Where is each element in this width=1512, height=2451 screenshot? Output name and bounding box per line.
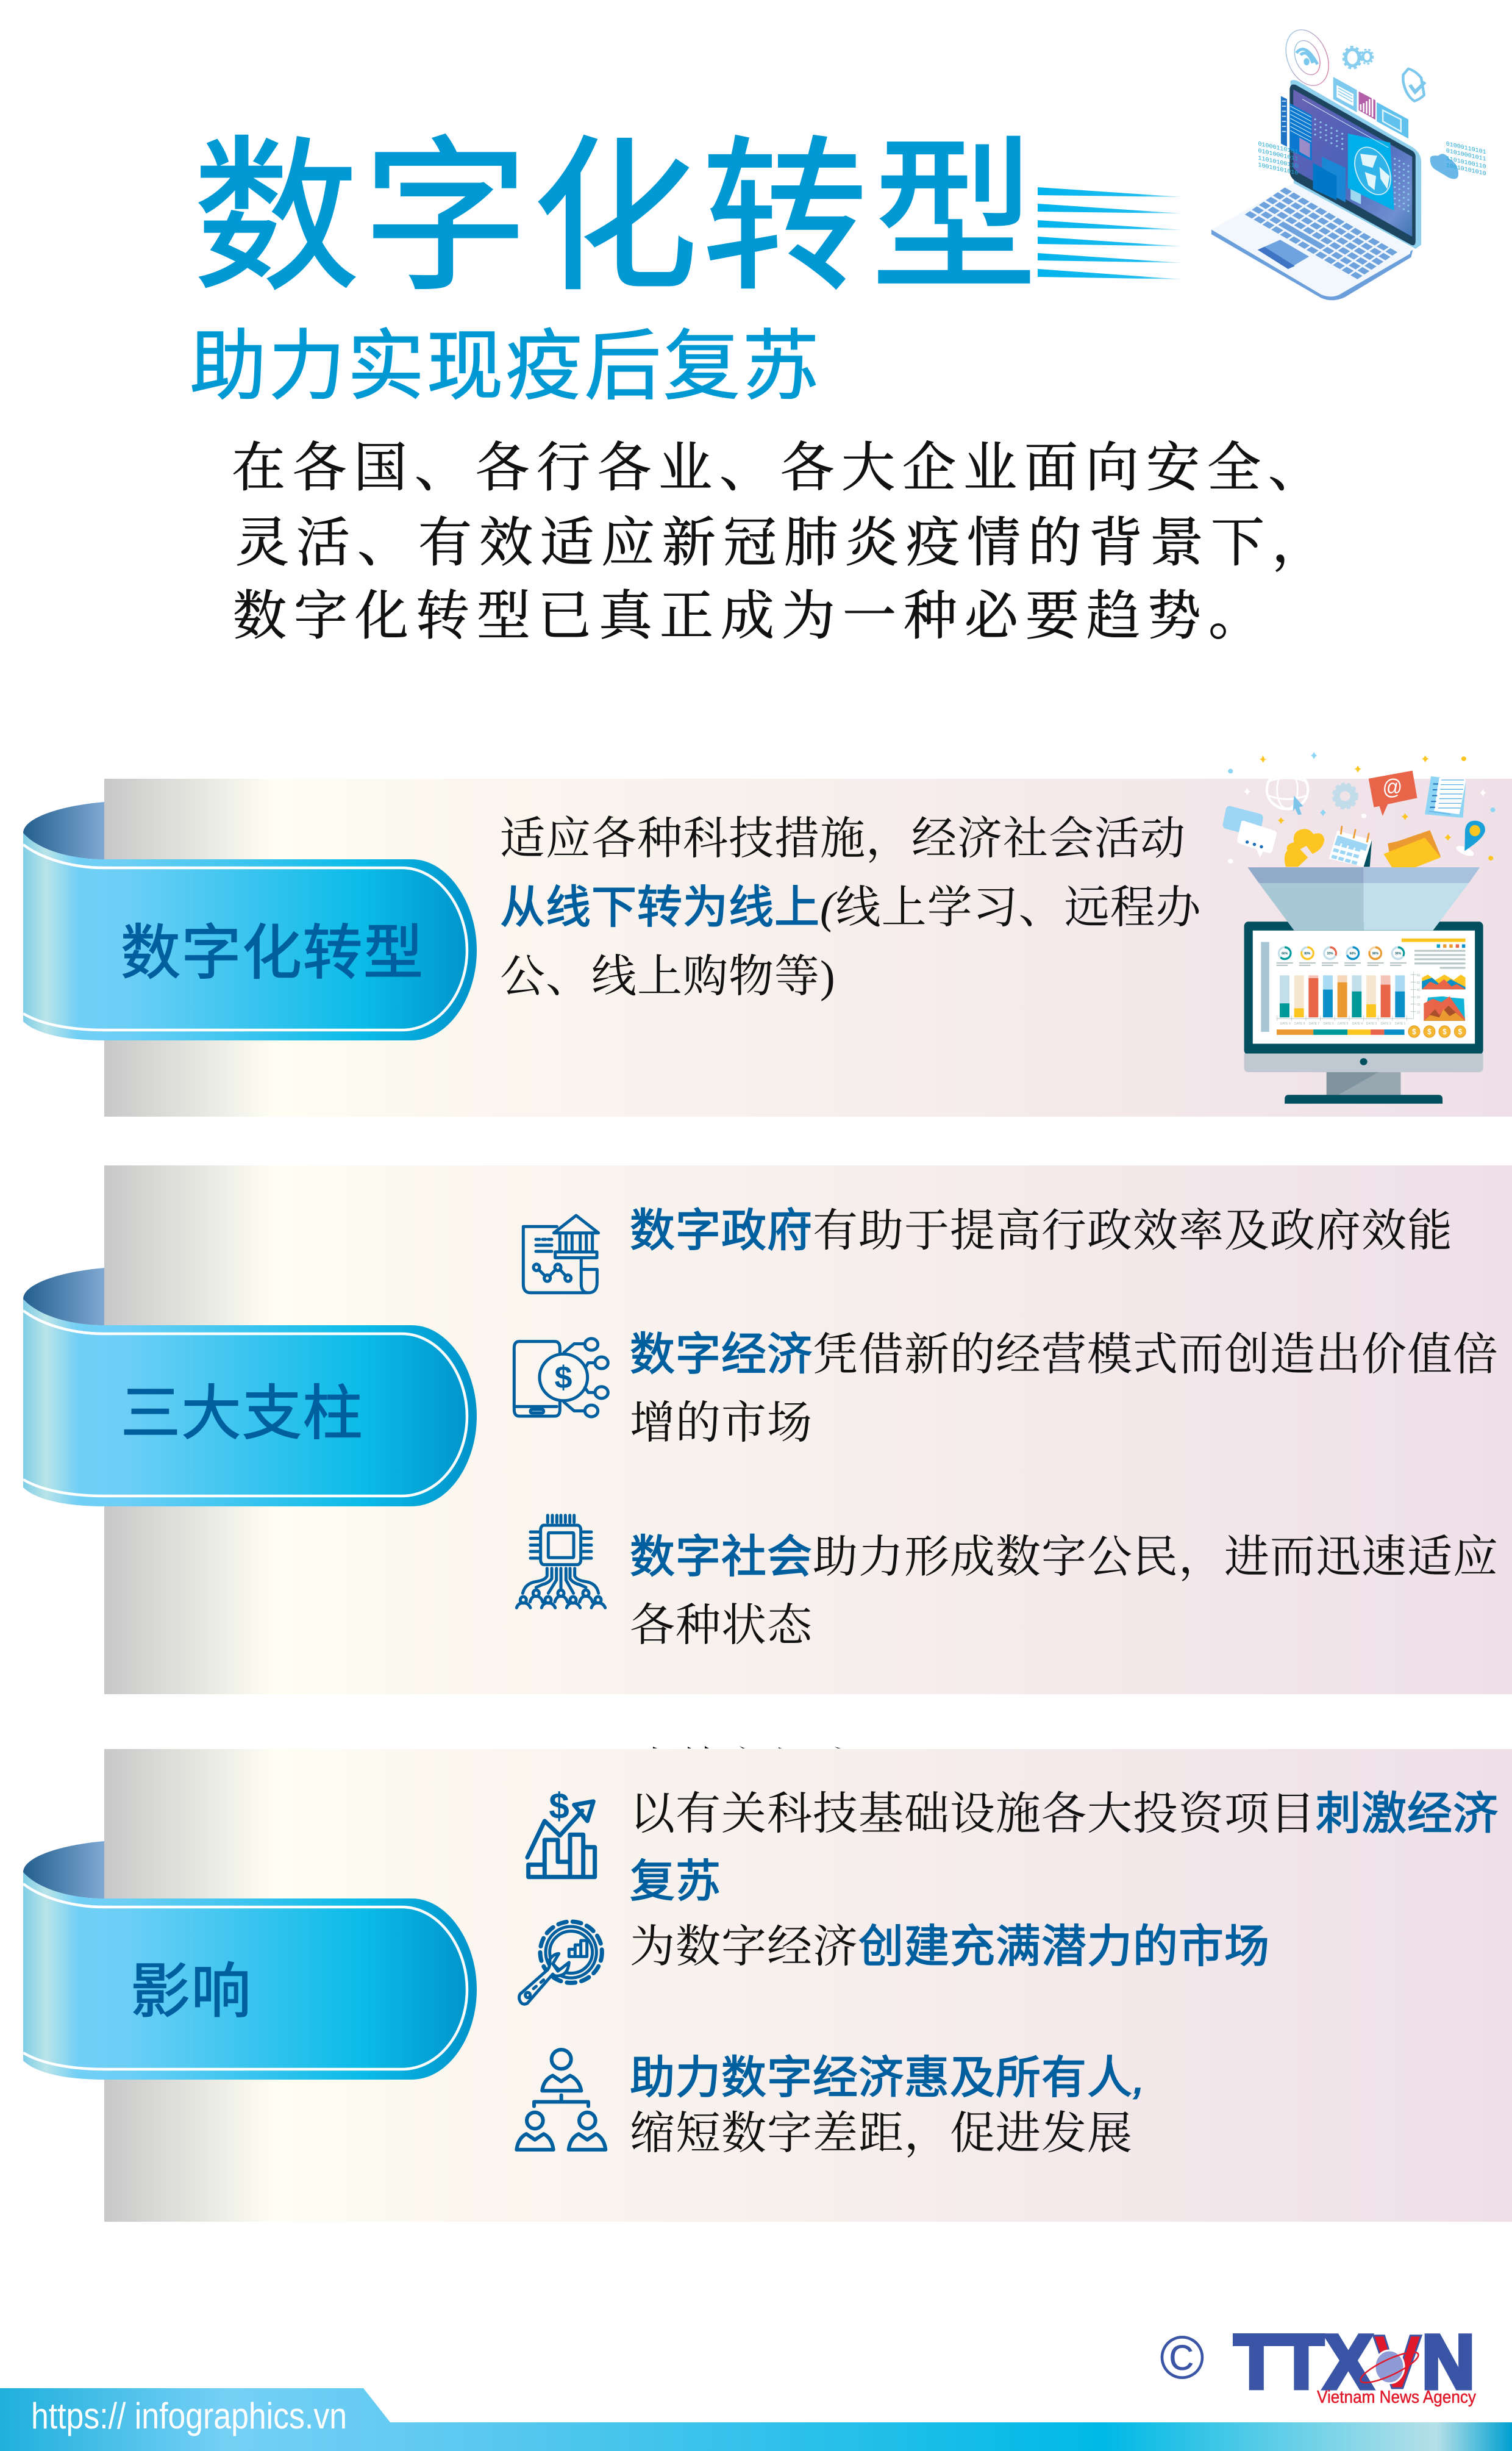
ribbon heading: three pillars: 三大支柱: [121, 1379, 363, 1447]
illustration: data funnel into monitor: DATE 2: [1380, 1022, 1391, 1026]
illustration: data funnel into monitor: 66%: [1282, 952, 1288, 956]
illustration: laptop with floating icons: 01010001011: [1446, 148, 1486, 163]
text: digital society: 数字社会助力形成数字公民，进而迅速适应: [630, 1531, 1499, 1583]
illustration: laptop with floating icons: 11010100110: [1446, 156, 1486, 171]
illustration: data funnel into monitor: 30: [1417, 996, 1420, 1000]
ribbon heading: digital transformation: [23, 802, 477, 1040]
illustration: laptop with floating icons: 10010101010: [1446, 162, 1486, 177]
panel: three pillars: [23, 1165, 1512, 1694]
icon: people hierarchy: [516, 2050, 605, 2150]
illustration: data funnel into monitor: $: [1458, 1027, 1462, 1036]
illustration: data funnel into monitor: 30%: [1395, 952, 1401, 956]
text: digital inclusion: 助力数字经济惠及所有人,: [630, 2052, 1146, 2103]
illustration: data funnel into monitor: $: [1427, 1027, 1432, 1036]
panel: digital transformation: [23, 752, 1512, 1117]
text: digital government: 数字政府有助于提高行政效率及政府效能: [630, 1205, 1453, 1256]
text: digital inclusion: [630, 2052, 1146, 2159]
icon: investment growth: [527, 1786, 595, 1877]
icon: investment growth: $: [549, 1786, 569, 1827]
copyright symbol: ©: [1160, 2324, 1205, 2392]
text: digital economy: [630, 1329, 1499, 1448]
footer band: [0, 2388, 1512, 2451]
footer url: https:// infographics.vn: [31, 2396, 347, 2436]
illustration: data funnel into monitor: $: [1442, 1027, 1447, 1036]
illustration: data funnel into monitor: DATE 1: [1395, 1022, 1405, 1026]
ribbon heading: impact: [23, 1841, 477, 2080]
text: digital society: [630, 1531, 1499, 1651]
illustration: data funnel into monitor: 10: [1417, 1011, 1420, 1014]
illustration: data funnel into monitor: 60: [1417, 974, 1420, 978]
icon: digital society: [516, 1515, 605, 1608]
panel: impact: [23, 1749, 1512, 2222]
icon: digital economy: $: [555, 1360, 572, 1395]
intro paragraph: 灵活、有效适应新冠肺炎疫情的背景下，: [235, 514, 1333, 573]
illustration: laptop with floating icons: 10010101010: [1258, 162, 1298, 177]
illustration: data funnel into monitor: 80%: [1304, 952, 1311, 956]
illustration: data funnel into monitor: 66%: [1350, 952, 1356, 956]
illustration: laptop with floating icons: 01000110101: [1258, 141, 1298, 156]
text: digital inclusion: 缩短数字差距，促进发展: [630, 2109, 1133, 2159]
logo: TTXVN: TTXVN: [1234, 2320, 1475, 2405]
intro paragraph: [232, 439, 1333, 646]
title: 数字化转型: [193, 125, 1041, 310]
text: stimulate economic recovery: 以有关科技基础设施各大投资项目刺激经济: [630, 1788, 1499, 1839]
icon: digital government: [523, 1215, 599, 1293]
ribbon heading: digital transformation: 数字化转型: [121, 919, 424, 986]
speed lines beside title: [1038, 187, 1183, 279]
text: digital transformation description: 公、线上购物等): [500, 952, 836, 1002]
illustration: data funnel into monitor: DATE 9: [1280, 1022, 1291, 1026]
text: digital economy: 增的市场: [630, 1398, 813, 1448]
clipped text remnants above third panel: [653, 1746, 841, 1748]
illustration: laptop with floating icons: 01010001011: [1258, 148, 1298, 163]
illustration: data funnel into monitor: DATE 8: [1294, 1022, 1305, 1026]
illustration: data funnel into monitor: DATE 5: [1338, 1022, 1348, 1026]
illustration: laptop with floating icons: 01000110101: [1446, 141, 1486, 156]
illustration: laptop with floating icons: 11010100110: [1258, 156, 1298, 170]
illustration: data funnel into monitor: $: [1412, 1027, 1416, 1036]
illustration: data funnel into monitor: [1222, 752, 1496, 1104]
text: digital economy: 数字经济凭借新的经营模式而创造出价值倍: [630, 1329, 1499, 1380]
text: digital transformation description: [500, 814, 1202, 1002]
logo: TTXVN: Vietnam News Agency: [1317, 2388, 1476, 2407]
illustration: data funnel into monitor: @: [1383, 775, 1402, 800]
text: create potential market: 为数字经济创建充满潜力的市场: [630, 1921, 1270, 1972]
text: stimulate economic recovery: 复苏: [630, 1856, 721, 1906]
illustration: data funnel into monitor: DATE 6: [1323, 1022, 1334, 1026]
text: digital transformation description: 从线下转为线上(线上学习、远程办: [500, 882, 1202, 933]
text: digital transformation description: 适应各种科技措施，经济社会活动: [500, 814, 1186, 864]
icon: digital economy: [514, 1339, 608, 1417]
illustration: data funnel into monitor: 33%: [1327, 952, 1333, 956]
ribbon heading: impact: 影响: [130, 1958, 252, 2025]
illustration: data funnel into monitor: 90%: [1372, 952, 1378, 956]
intro paragraph: 在各国、各行各业、各大企业面向安全、: [232, 439, 1329, 498]
ribbon heading: three pillars: [23, 1268, 477, 1506]
illustration: data funnel into monitor: 50: [1417, 981, 1420, 985]
illustration: laptop with floating icons: [1211, 25, 1486, 300]
illustration: data funnel into monitor: 20: [1417, 1003, 1420, 1007]
subtitle: 助力实现疫后复苏: [190, 323, 821, 409]
illustration: data funnel into monitor: 40: [1417, 989, 1420, 992]
text: stimulate economic recovery: [630, 1788, 1499, 1906]
text: digital society: 各种状态: [630, 1601, 813, 1651]
icon: gear and wrench: [519, 1922, 602, 2004]
illustration: data funnel into monitor: DATE 3: [1366, 1022, 1377, 1026]
illustration: data funnel into monitor: DATE 4: [1352, 1022, 1363, 1026]
intro paragraph: 数字化转型已真正成为一种必要趋势。: [233, 587, 1269, 646]
illustration: data funnel into monitor: DATE 7: [1309, 1022, 1319, 1026]
